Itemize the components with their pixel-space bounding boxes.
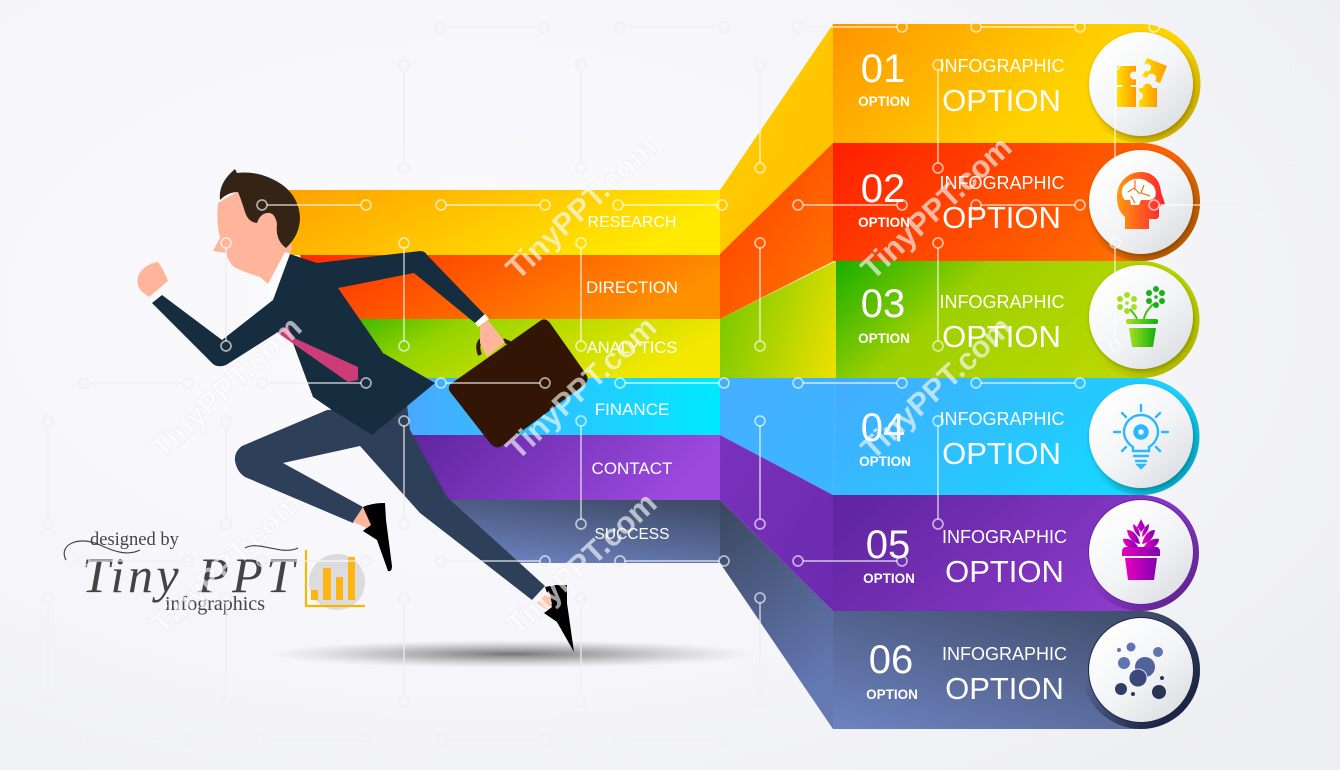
left band labels: RESEARCH — [588, 214, 676, 231]
front ankle — [537, 591, 552, 610]
band: analytics — [350, 319, 720, 378]
icon: puzzle — [1117, 58, 1167, 107]
left stacked bands — [285, 190, 720, 563]
panel: option 01: 01 — [861, 47, 905, 91]
front shoe — [544, 585, 574, 652]
fold: blue — [720, 378, 836, 495]
panel: option 06: 06 — [869, 638, 913, 682]
panel: option 01 — [833, 24, 1201, 143]
logo: designed by TinyPPT infographics — [64, 530, 365, 615]
panel: option 03: 03 — [861, 282, 905, 326]
fold: purple — [720, 435, 833, 611]
panel: option 03: INFOGRAPHIC — [939, 292, 1065, 312]
watermarks: TinyPPT.com — [854, 129, 1018, 286]
right cuff — [475, 314, 489, 327]
panel: option 02 — [833, 143, 1200, 261]
fold: yellow — [720, 24, 833, 254]
icon: light bulb with gear — [1114, 405, 1168, 468]
left band labels: CONTACT — [592, 459, 672, 478]
icon: succulent — [1122, 519, 1160, 580]
panel: option 05: 05 — [866, 523, 910, 567]
watermarks: TinyPPT.com — [499, 129, 663, 286]
watermarks: TinyPPT.com — [854, 309, 1018, 466]
band: contact — [412, 435, 720, 500]
band: success — [445, 500, 720, 563]
panel: option 06: OPTION — [945, 671, 1064, 706]
panel: option 05: OPTION — [863, 571, 915, 586]
panel: option 04: 04 — [861, 406, 905, 450]
panel: option 02: 02 — [861, 167, 905, 211]
fold: orange — [720, 143, 834, 319]
hair — [220, 169, 300, 248]
watermarks: TinyPPT.com — [499, 309, 663, 466]
panel: option 02: OPTION — [942, 200, 1061, 235]
logo: designed by TinyPPT infographics: designed by — [90, 530, 180, 550]
band: research — [285, 190, 720, 255]
left band labels: ANALYTICS — [587, 339, 677, 357]
panel: option 03: OPTION — [858, 331, 910, 346]
fold: slate — [720, 500, 833, 729]
panel: option 05: OPTION — [945, 554, 1064, 589]
panel: option 02: OPTION — [858, 215, 910, 230]
logo: designed by TinyPPT infographics: Tiny PPT — [82, 547, 297, 603]
panel: option 05 — [833, 495, 1199, 611]
watermarks: TinyPPT.com — [144, 309, 308, 466]
left band labels: FINANCE — [595, 400, 669, 419]
left cuff — [150, 293, 162, 304]
logo chart icon — [306, 550, 365, 610]
panel: option 04 — [833, 378, 1200, 495]
left band labels: SUCCESS — [595, 526, 669, 543]
icon: head with brain — [1117, 172, 1165, 229]
trousers — [235, 405, 545, 600]
rear shoe — [363, 503, 392, 571]
briefcase — [449, 319, 588, 447]
ground shadow — [267, 640, 757, 668]
logo: designed by TinyPPT infographics: infographics — [165, 593, 265, 615]
panel: option 06: INFOGRAPHIC — [942, 644, 1067, 664]
band: finance — [400, 378, 720, 435]
panel: option 06: OPTION — [866, 687, 918, 702]
panel: option 06 — [833, 611, 1200, 729]
watermarks: TinyPPT.com — [144, 485, 308, 642]
watermarks — [144, 129, 1018, 642]
panel: option 03: OPTION — [942, 319, 1061, 354]
left band labels: DIRECTION — [586, 278, 678, 297]
panel: option 05: INFOGRAPHIC — [942, 527, 1067, 547]
panel: option 02: INFOGRAPHIC — [939, 173, 1065, 193]
face — [213, 190, 292, 284]
panel: option 01: OPTION — [942, 83, 1061, 118]
icon: bubbles — [1115, 642, 1166, 699]
watermarks: TinyPPT.com — [499, 485, 663, 642]
fist — [137, 262, 168, 297]
right hand — [480, 320, 505, 357]
connector folds — [720, 24, 836, 729]
panel: option 04: INFOGRAPHIC — [939, 409, 1065, 429]
rear ankle — [353, 507, 371, 528]
shirt — [268, 252, 291, 300]
panel: option 01: OPTION — [858, 94, 910, 109]
left band labels — [586, 214, 678, 543]
panel: option 04: OPTION — [859, 454, 911, 469]
panel: option 03 — [836, 261, 1200, 378]
icon: flower pot — [1117, 286, 1165, 347]
panel: option 04: OPTION — [942, 436, 1061, 471]
panel: option 01: INFOGRAPHIC — [939, 56, 1065, 76]
running businessman — [137, 169, 588, 652]
band: direction — [300, 255, 720, 319]
jacket — [152, 251, 485, 435]
tie — [278, 325, 358, 382]
fold: green — [720, 261, 836, 378]
case handle — [478, 340, 510, 355]
